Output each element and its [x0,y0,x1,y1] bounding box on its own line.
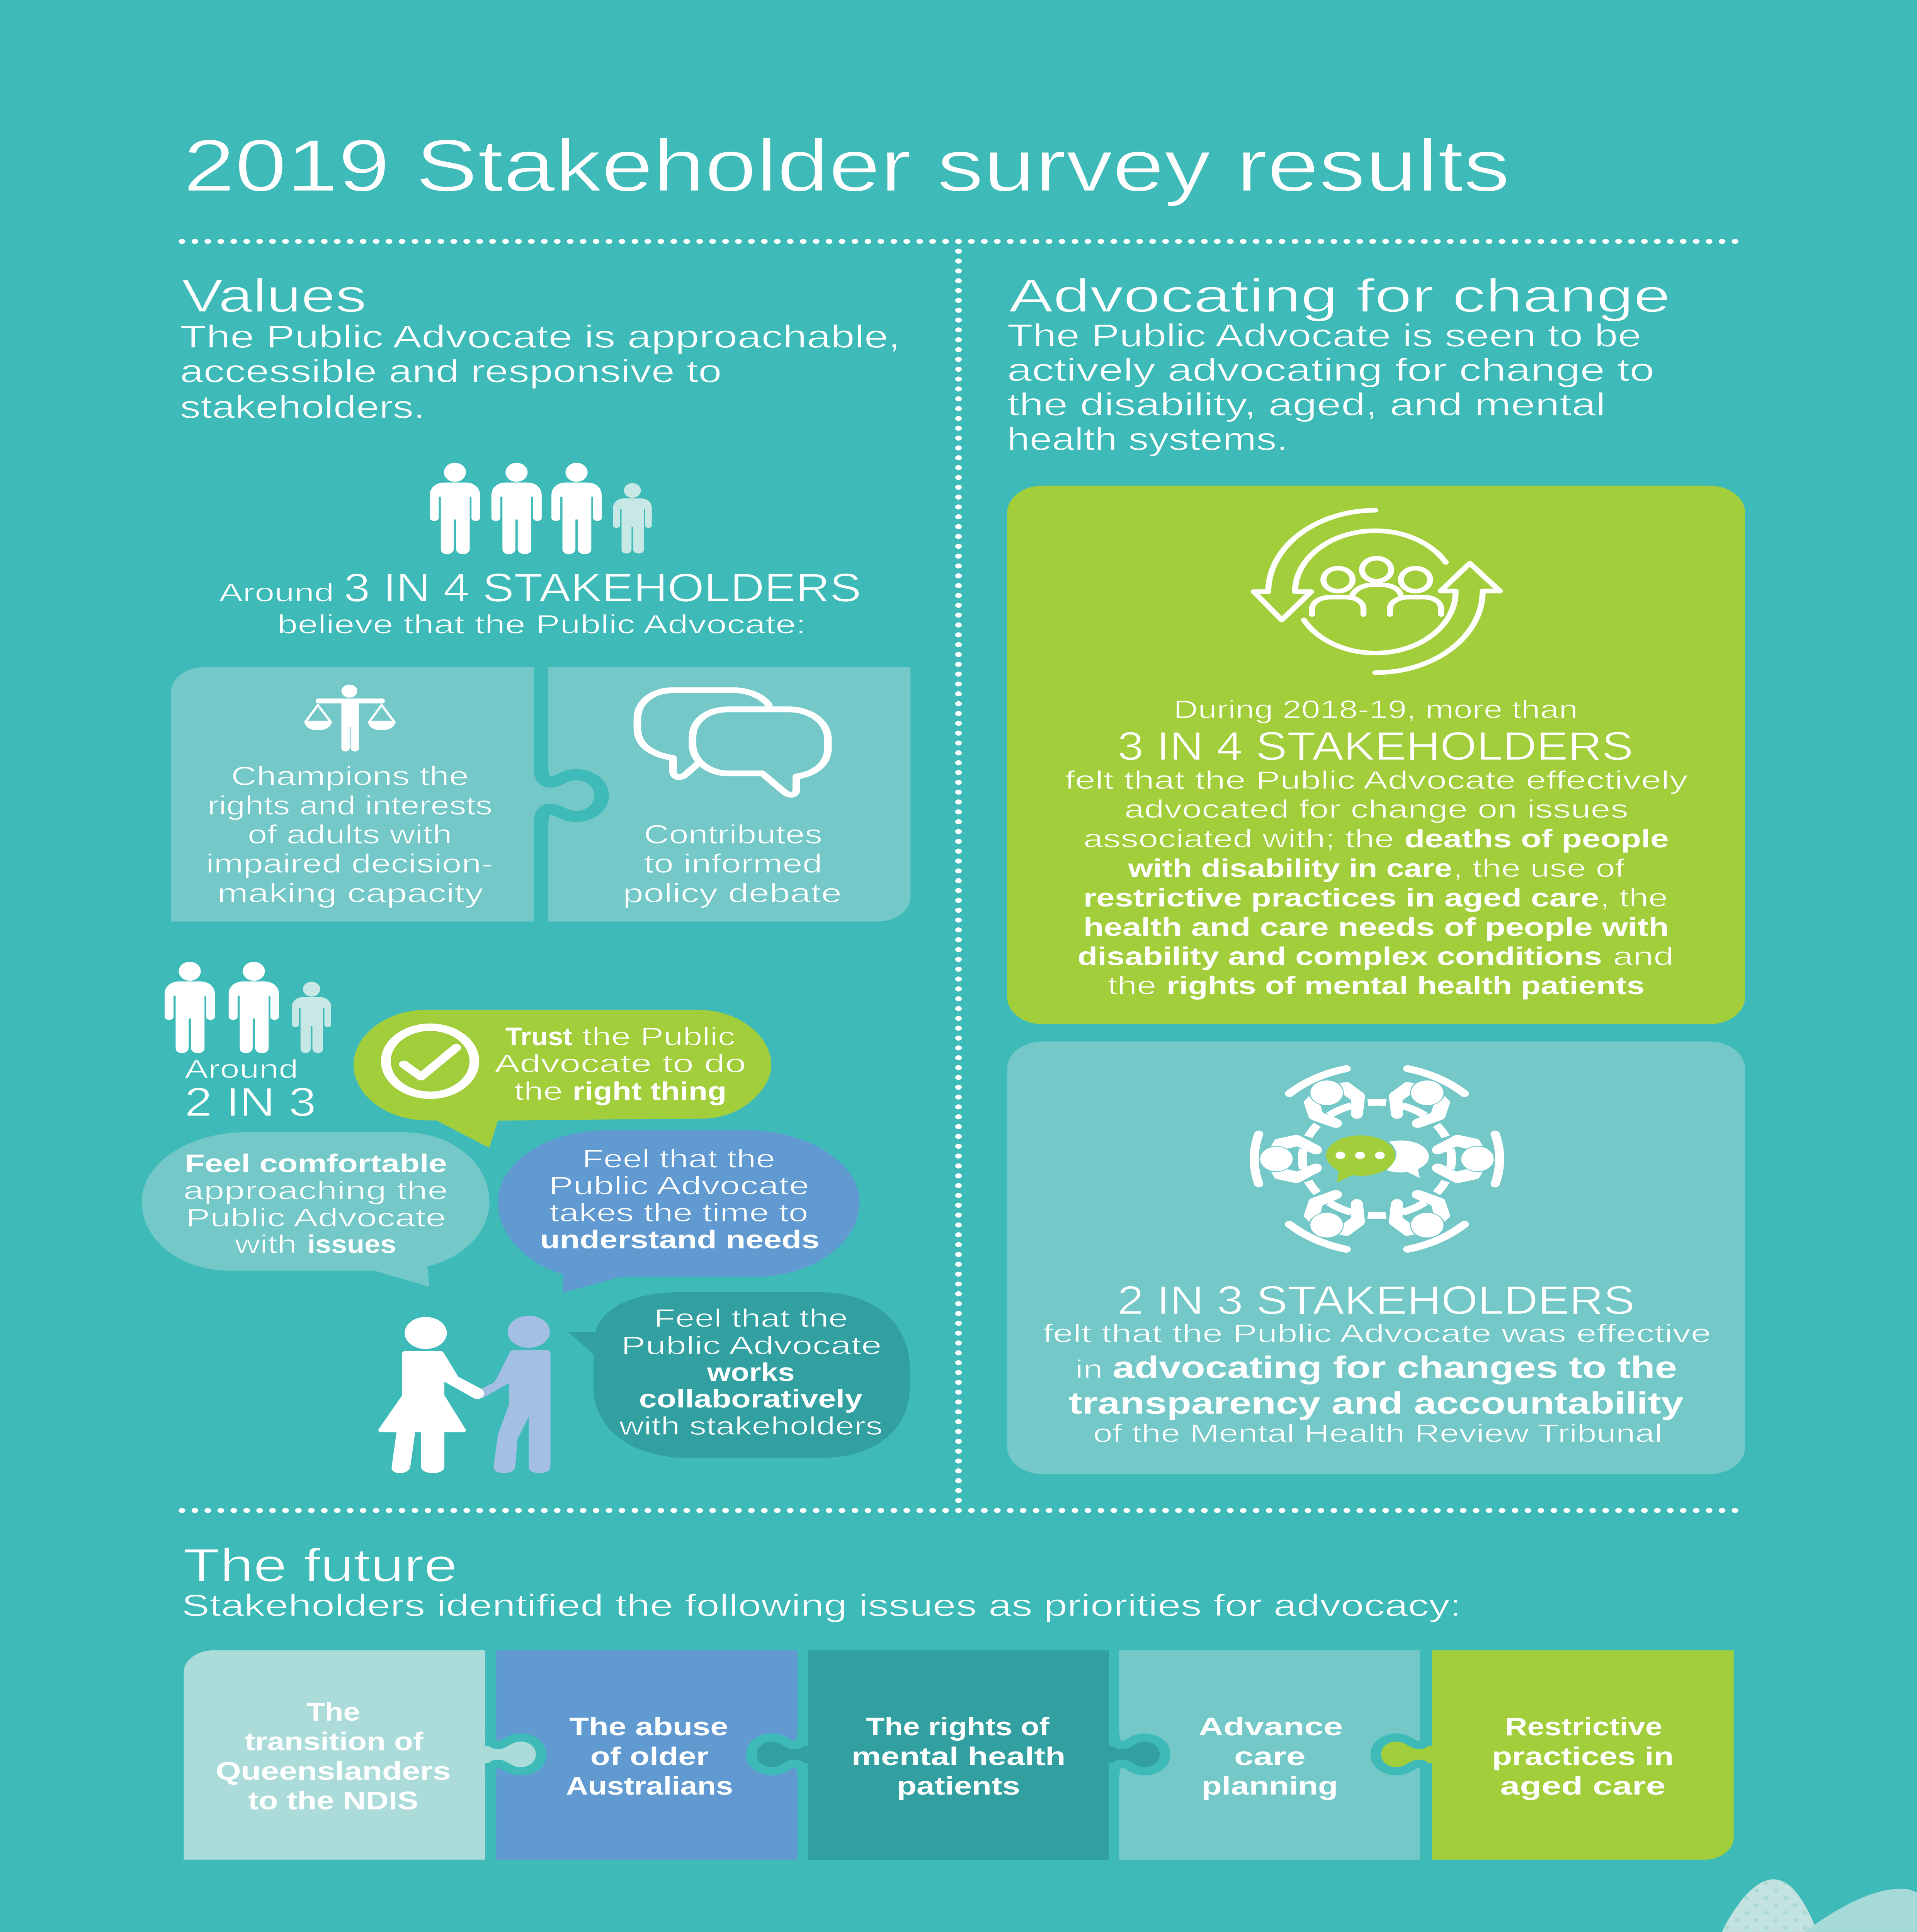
text: two in three advocacy [1043,1277,1711,1448]
piece: transition to the NDIS: Queenslanders [216,1757,451,1786]
text: three in four advocacy: with disability in care [1128,854,1452,883]
speech bubble: comfortable: approaching the [183,1177,448,1205]
piece: rights of mental health patients: mental health [851,1743,1066,1770]
speech bubble: works collaboratively: with stakeholders [619,1412,883,1440]
piece: rights of mental health patients [808,1650,1109,1860]
text: champions rights [206,761,493,908]
piece: transition to the NDIS [184,1650,485,1860]
heading: values: Values [182,270,367,322]
piece: restrictive practices in aged care: Restrictive [1505,1713,1662,1741]
text: three in four advocacy: deaths of people [1405,825,1669,853]
text: three in four advocacy: , the use of [1453,854,1625,883]
panel: green three in four [1007,486,1745,1024]
text: two in three advocacy: advocating for changes to the [1112,1350,1677,1384]
text: contributes to debate: policy debate [623,878,842,908]
text: contributes to debate: to informed [644,849,822,878]
three in four stat: 3 IN 4 STAKEHOLDERS [344,565,861,610]
text: three in four advocacy: disability and complex conditions [1078,942,1602,971]
piece: abuse of older Australians [483,1650,809,1860]
speech bubble: comfortable: issues [307,1230,396,1259]
advocating intro text: actively advocating for change to [1007,352,1654,388]
puzzle: five priorities [184,1650,1734,1860]
text: three in four advocacy: , the [1600,884,1668,912]
speech bubble: trust: the Public [582,1023,735,1051]
text: three in four advocacy: and [1613,942,1674,971]
text: champions rights: of adults with [248,819,452,849]
speech bubble: understand needs: takes the time to [549,1199,808,1227]
piece: restrictive practices in aged care: aged care [1500,1772,1665,1800]
text: two in three advocacy: transparency and accountability [1069,1386,1684,1420]
heading: the future: The future [183,1539,458,1592]
piece: advance care planning [1107,1650,1434,1860]
puzzle: champions and contributes [171,667,910,922]
icon: two people shaking hands [378,1316,551,1473]
icon: justice figure with scales [304,685,395,752]
two in three stat: Around [185,1054,298,1083]
values intro text: The Public Advocate is approachable, [180,318,900,354]
speech bubble: works collaboratively: Public Advocate [621,1332,882,1360]
title: 2019 Stakeholder survey results [183,124,1510,207]
text: contributes to debate [623,819,842,908]
advocating intro text: health systems. [1007,421,1288,457]
icon: three in four people [430,463,652,554]
piece: advance care planning: care [1234,1743,1306,1770]
text: two in three advocacy: 2 IN 3 STAKEHOLDERS [1118,1277,1635,1323]
text: two in three advocacy: in [1075,1355,1103,1384]
text: champions rights: making capacity [217,878,483,908]
piece: rights of mental health patients: The rights of [866,1713,1050,1741]
two in three stat: 2 IN 3 [185,1080,316,1125]
speech bubble: understand needs: Public Advocate [549,1172,809,1200]
piece: advance care planning: Advance [1199,1713,1343,1741]
text: three in four advocacy: associated with; the [1084,825,1394,853]
piece: transition to the NDIS: transition of [245,1728,424,1756]
speech bubble: trust [354,1010,771,1148]
icon: check mark [386,1027,475,1095]
two in three stat [185,1054,316,1125]
speech bubble: works collaboratively [569,1292,910,1458]
panel: advocating for change [1007,270,1745,1474]
panel: teal two in three [1007,1041,1745,1474]
future intro text: Stakeholders identified the following issues as priorities for advocacy: [182,1588,1461,1622]
advocating intro text: the disability, aged, and mental [1007,386,1606,422]
values intro text: accessible and responsive to [180,353,722,389]
speech bubble: trust: Advocate to do [495,1050,746,1078]
three in four stat [219,565,861,639]
speech bubble: comfortable: Public Advocate [186,1204,446,1232]
text: two in three advocacy: of the Mental Health Review Tribunal [1093,1420,1662,1448]
piece: transition to the NDIS: The [306,1698,360,1726]
text: champions rights: Champions the [231,761,469,791]
values intro text: stakeholders. [180,389,425,425]
speech bubble: understand needs [498,1130,859,1293]
piece: rights of mental health patients: patients [897,1772,1020,1800]
text: three in four advocacy: rights of mental health patients [1167,972,1645,1000]
icon: two speech bubbles [637,690,828,795]
piece: transition to the NDIS: to the NDIS [248,1787,418,1815]
speech bubble: trust: the [514,1077,563,1105]
text: three in four advocacy: felt that the Public Advocate effectively [1065,766,1688,794]
piece: advance care planning: planning [1202,1772,1338,1800]
speech bubble: comfortable: Feel comfortable [185,1150,447,1178]
values intro text [180,318,900,425]
speech bubble: works collaboratively: works [707,1359,795,1387]
advocating intro text: The Public Advocate is seen to be [1007,317,1641,353]
text: three in four advocacy: health and care needs of people with [1084,913,1669,942]
text: three in four advocacy: 3 IN 4 STAKEHOLDERS [1118,723,1633,769]
icon: round table meeting [1254,1061,1500,1257]
piece: restrictive practices in aged care: practices in [1492,1743,1674,1770]
text: three in four advocacy: restrictive practices in aged care [1084,884,1599,912]
icon: two in three people [165,962,331,1053]
speech bubble: works collaboratively: collaboratively [639,1385,863,1413]
speech bubble: trust: right thing [573,1077,726,1105]
speech bubble: comfortable [142,1132,490,1287]
piece: abuse of older Australians: The abuse [569,1713,728,1741]
piece: abuse of older Australians: of older [590,1743,709,1770]
speech bubble: understand needs: Feel that the [582,1145,775,1173]
icon: people in circular arrows [1254,510,1500,673]
heading: advocating for change: Advocating for change [1009,270,1670,322]
advocating intro text [1007,317,1654,457]
speech bubble: trust: Trust [505,1023,572,1051]
text: contributes to debate: Contributes [644,819,822,849]
text: three in four advocacy [1065,696,1688,1000]
speech bubble: understand needs: understand needs [540,1226,820,1254]
text: three in four advocacy: During 2018-19, more than [1174,696,1578,724]
three in four stat: Around [219,578,334,607]
decoration: corner hills [1722,1879,1917,1932]
text: two in three advocacy: felt that the Public Advocate was effective [1043,1320,1711,1348]
panel: values [142,270,910,1473]
text: champions rights: rights and interests [208,790,492,820]
speech bubble: comfortable: with [235,1230,297,1259]
piece: restrictive practices in aged care [1432,1650,1734,1860]
text: three in four advocacy: the [1108,972,1157,1000]
text: champions rights: impaired decision- [206,849,493,878]
speech bubble: works collaboratively: Feel that the [654,1304,848,1333]
panel: the future [182,1539,1734,1860]
piece: abuse of older Australians: Australians [566,1772,733,1800]
three in four stat: believe that the Public Advocate: [277,609,806,639]
text: three in four advocacy: advocated for change on issues [1124,796,1628,823]
